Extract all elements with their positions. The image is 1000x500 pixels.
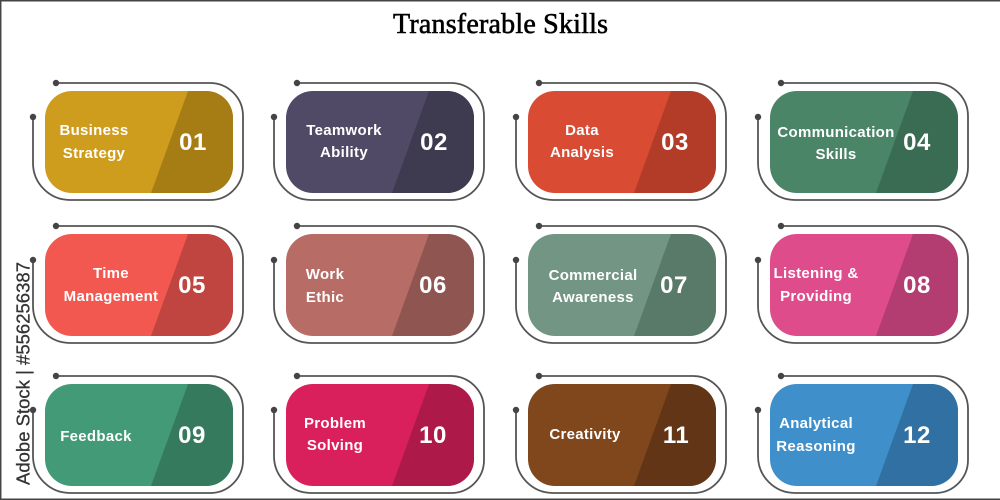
panel: 03 Data Analysis: 03 [661,129,689,156]
panel: 06 Work Ethic [271,223,484,343]
panel: 06 Work Ethic: 06 [419,272,447,299]
panel: 01 Business Strategy: Business [59,122,129,139]
panel: 01 Business Strategy: Strategy [63,145,126,162]
panel: 09 Feedback: Feedback [60,428,132,445]
panel: 07 Commercial Awareness: Commercial [549,267,637,284]
panel: 04 Communication Skills: 04 [903,129,931,156]
panel: 06 Work Ethic: Ethic [306,289,344,306]
panel: 10 Problem Solving: 10 [419,422,447,449]
panel: 02 Teamwork Ability [271,80,484,200]
panel: 08 Listening & Providing: Providing [780,288,852,305]
vertical stock credit: Adobe Stock | #556256387 [12,262,34,485]
panel: 07 Commercial Awareness: 07 [660,272,688,299]
panel: 05 Time Management [30,223,243,343]
panel: 10 Problem Solving [271,373,484,493]
panel: 09 Feedback [30,373,243,493]
panel: 01 Business Strategy [30,80,243,200]
panel: 07 Commercial Awareness: Awareness [552,289,634,306]
panel: 04 Communication Skills: Skills [816,146,856,163]
panel: 08 Listening & Providing [755,223,968,343]
panel: 03 Data Analysis: Analysis [550,144,614,161]
panel: 08 Listening & Providing: 08 [903,272,931,299]
panel: 04 Communication Skills: Communication [777,124,895,141]
panel: 08 Listening & Providing: Listening & [774,265,858,282]
panel: 12 Analytical Reasoning [755,373,968,493]
panel: 12 Analytical Reasoning: Analytical [779,415,853,432]
title: Transferable Skills [393,9,608,40]
panel: 07 Commercial Awareness [513,223,726,343]
panel: 11 Creativity: 11 [663,422,689,449]
panel: 11 Creativity [513,373,726,493]
panel: 10 Problem Solving: Problem [304,415,366,432]
panel: 03 Data Analysis [513,80,726,200]
panel: 02 Teamwork Ability: Ability [320,144,368,161]
panel: 02 Teamwork Ability: Teamwork [306,122,382,139]
panel: 06 Work Ethic: Work [306,266,345,283]
panel: 10 Problem Solving: Solving [307,437,363,454]
panel: 04 Communication Skills [755,80,968,200]
panel: 05 Time Management: Time [93,265,129,282]
panel: 12 Analytical Reasoning: Reasoning [776,438,856,455]
panel: 03 Data Analysis: Data [565,122,599,139]
panel: 09 Feedback: 09 [178,422,206,449]
panel: 05 Time Management: 05 [178,272,206,299]
panel: 02 Teamwork Ability: 02 [420,129,448,156]
panel: 05 Time Management: Management [64,288,158,305]
panel: 12 Analytical Reasoning: 12 [903,422,931,449]
panel: 11 Creativity: Creativity [549,426,621,443]
panel: 01 Business Strategy: 01 [179,129,207,156]
